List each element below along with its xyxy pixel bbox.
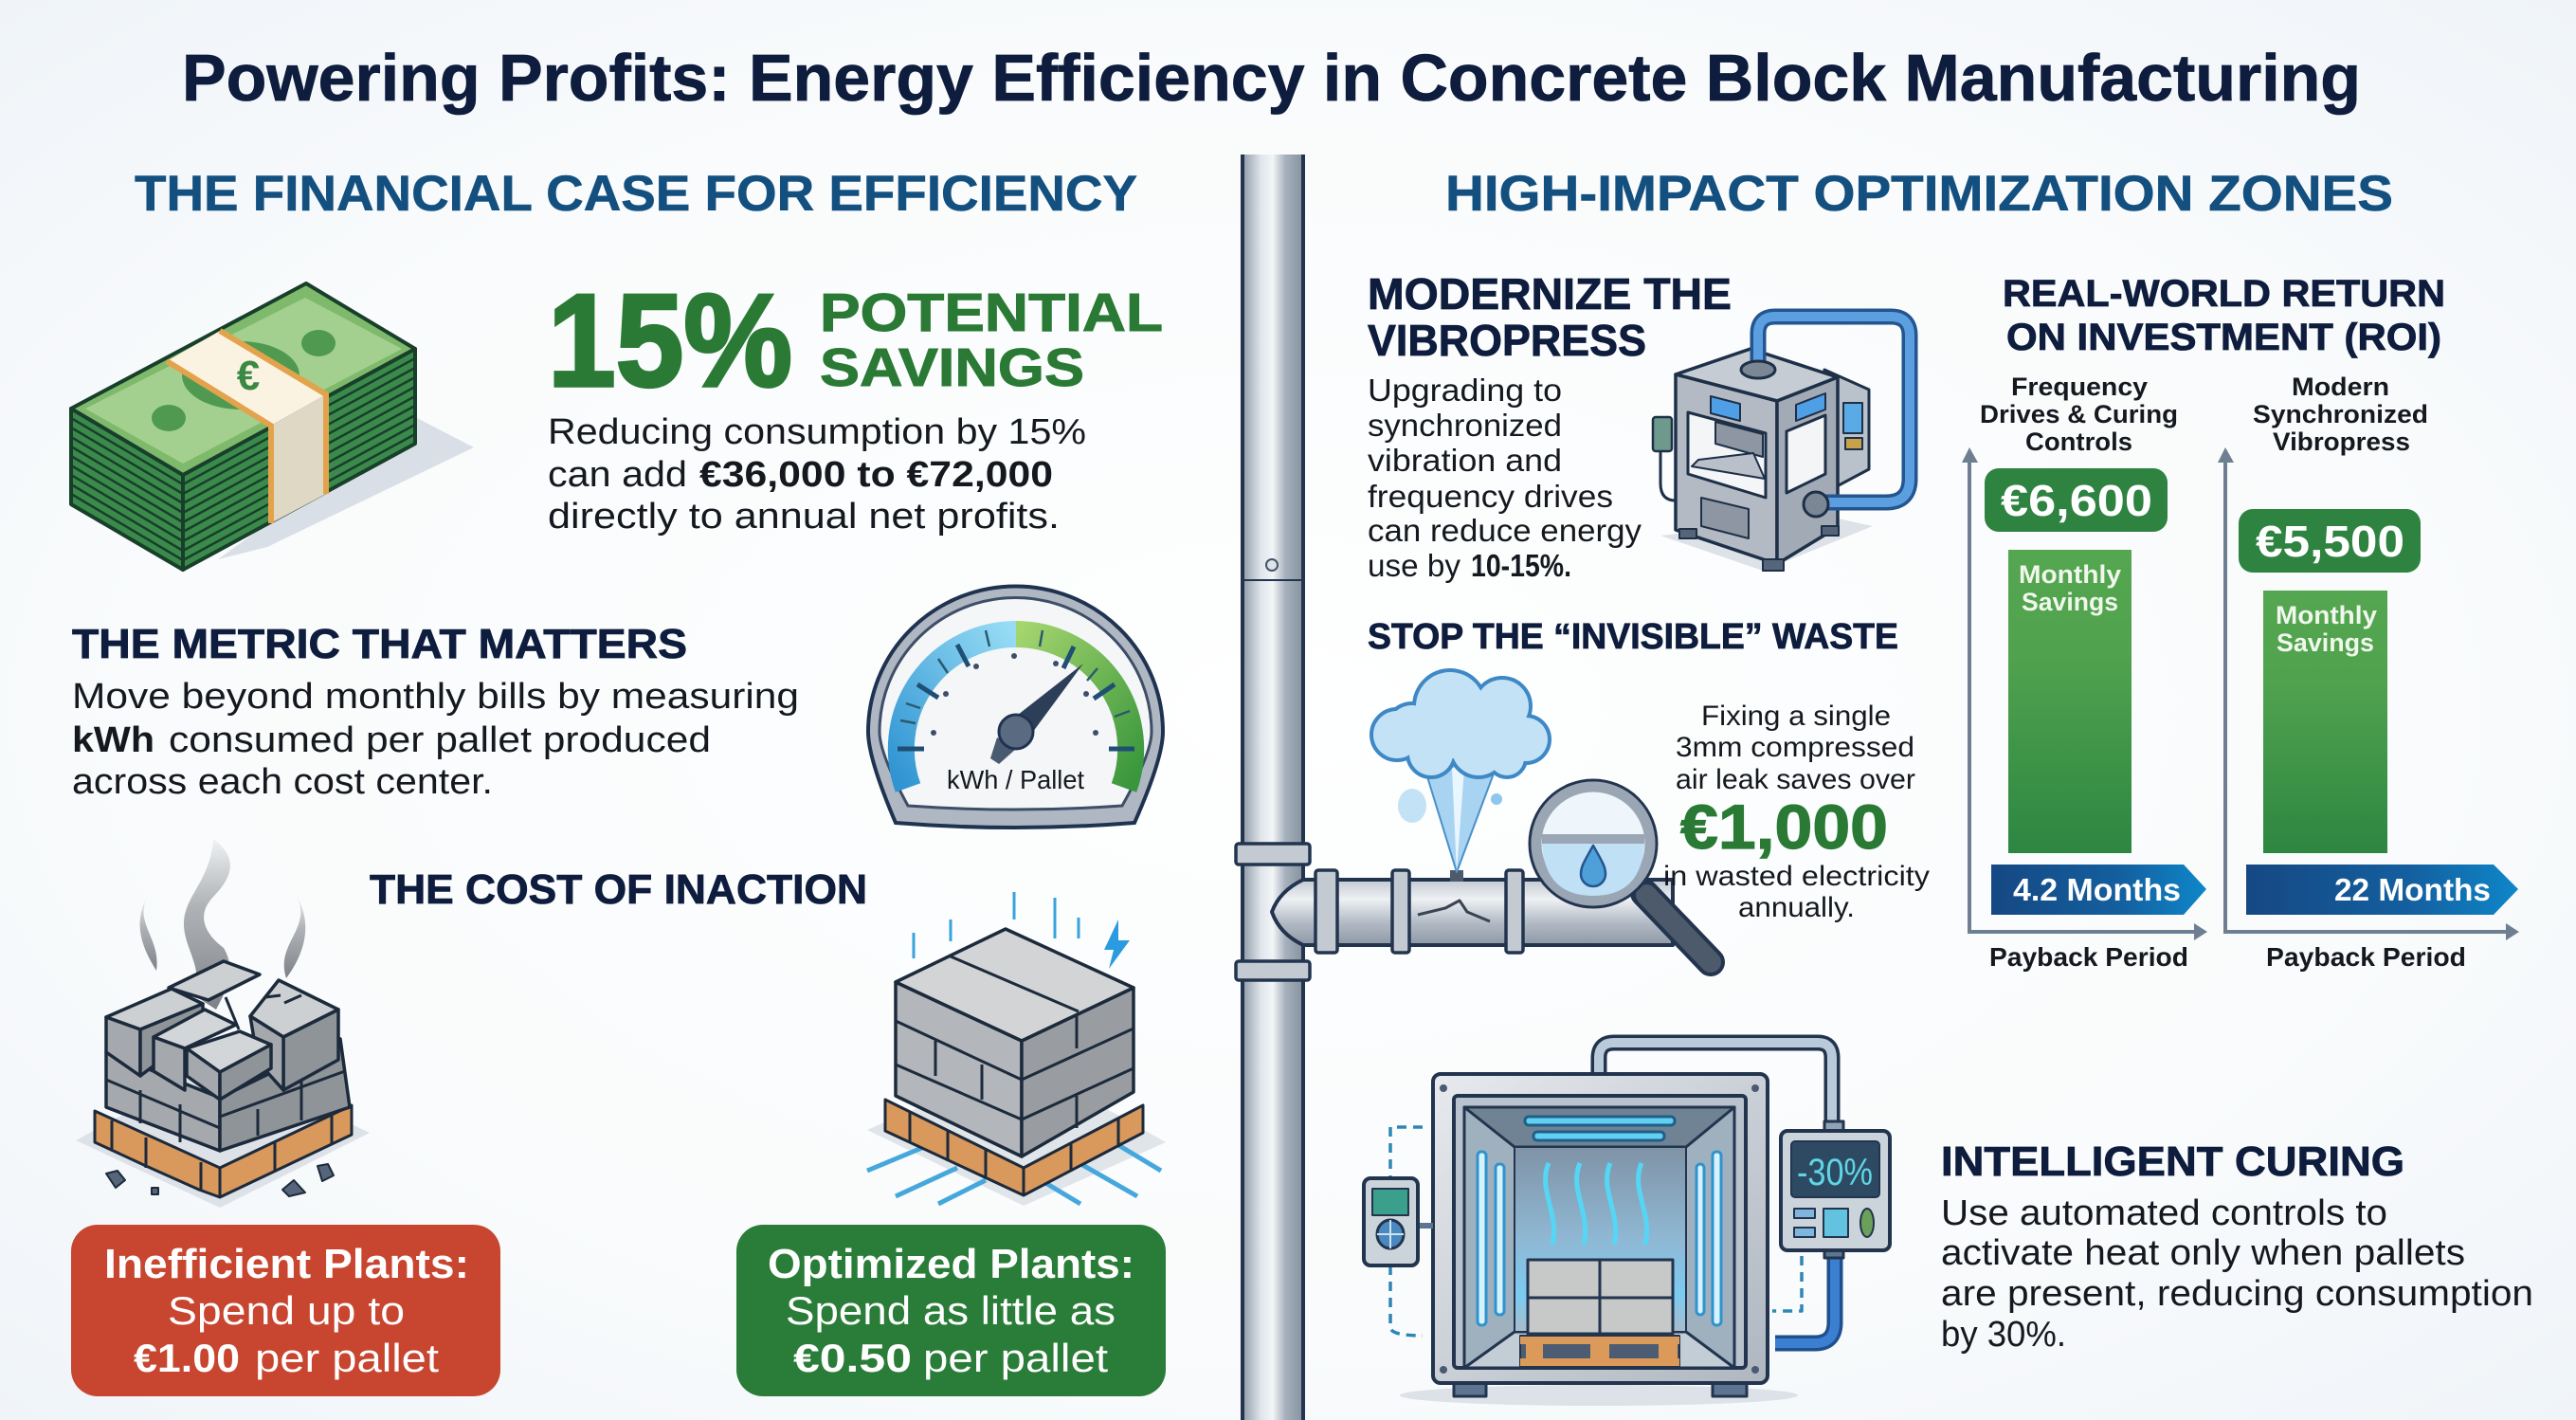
bar: monthly savings [2008, 550, 2132, 853]
icon: stack of euro banknotes [71, 283, 474, 570]
callout: optimized plants: Optimized Plants: [768, 1241, 1134, 1287]
value: 6600: €6,600 [2001, 476, 2152, 525]
chart: frequency drives and curing controls ROI: Payback Period [1989, 942, 2188, 972]
bar: monthly savings [2263, 591, 2387, 853]
bar: monthly savings: Monthly [2276, 601, 2377, 629]
control panel: sensor [1364, 1178, 1433, 1265]
text: vibropress description: vibration and [1368, 443, 1562, 478]
text: curing description: activate heat only when pallets [1941, 1233, 2465, 1273]
heading: real-world ROI: ON INVESTMENT (ROI) [2006, 317, 2441, 358]
chart label [1980, 373, 2178, 456]
stat: 15% potential savings: POTENTIAL [820, 282, 1163, 343]
divider: vertical pipe [1236, 155, 1310, 1420]
icon: intact blocks on pallet [867, 892, 1166, 1206]
arrow: payback 22 months [2246, 865, 2518, 915]
chart label: Drives & Curing [1980, 400, 2178, 428]
text: curing description: by 30%. [1941, 1315, 2066, 1355]
bar: monthly savings: Savings [2277, 628, 2374, 657]
value: 5500: €5,500 [2256, 517, 2404, 566]
icon: vibropress machine [1653, 317, 1910, 571]
chart label: Synchronized [2253, 400, 2428, 428]
chart: modern synchronized vibropress ROI: Payback Period [2266, 942, 2466, 972]
text: savings description: can add [548, 455, 687, 495]
text: metric description: consumed per pallet produced [169, 720, 711, 760]
heading: optimization zones: HIGH-IMPACT OPTIMIZATION ZONES [1445, 166, 2393, 222]
text: savings description: Reducing consumption by 15% [548, 412, 1086, 452]
chart label: Vibropress [2273, 428, 2410, 456]
value: 6600 [1985, 468, 2168, 532]
heading: financial case: THE FINANCIAL CASE FOR EFFICIENCY [135, 166, 1137, 222]
text: air leak savings: annually. [1738, 892, 1855, 923]
heading: modernize the vibropress: MODERNIZE THE [1368, 269, 1732, 319]
text: air leak savings: in wasted electricity [1663, 861, 1930, 892]
callout: optimized plants: Spend as little as [786, 1288, 1116, 1333]
icon: smart curing chamber [1364, 1043, 1890, 1406]
chart label: Frequency [2011, 373, 2148, 401]
icon: stack of euro banknotes: € [237, 353, 260, 399]
text: metric description: across each cost center. [72, 762, 493, 802]
text: metric description [72, 677, 799, 802]
callout: optimized plants: €0.50 [793, 1336, 912, 1380]
callout: inefficient plants: per pallet [255, 1336, 439, 1380]
stat: 15% potential savings: SAVINGS [820, 337, 1084, 398]
value: 5500 [2239, 509, 2421, 573]
heading: stop the invisible waste: STOP THE “INVISIBLE” WASTE [1368, 617, 1898, 657]
text: vibropress description: can reduce energy [1368, 513, 1642, 548]
stat: 15% potential savings [548, 267, 1163, 414]
icon: leaking pipe with magnifier [1272, 670, 1711, 962]
text: savings description: €36,000 to €72,000 [699, 455, 1053, 495]
callout: inefficient plants: €1.00 [134, 1336, 240, 1380]
chart label: Controls [2025, 428, 2132, 456]
text: air leak savings [1663, 701, 1930, 923]
text: air leak savings: air leak saves over [1676, 764, 1915, 795]
heading: real-world ROI: REAL-WORLD RETURN [2003, 273, 2445, 315]
text: curing description: Use automated controls to [1941, 1193, 2387, 1233]
text: air leak savings: €1,000 [1680, 792, 1888, 862]
bar: monthly savings: Savings [2022, 588, 2118, 616]
text: metric description: kWh [72, 720, 154, 760]
text: air leak savings: 3mm compressed [1676, 732, 1914, 763]
chart: modern synchronized vibropress ROI [2218, 373, 2519, 972]
callout: inefficient plants [71, 1225, 500, 1396]
callout: inefficient plants: Spend up to [168, 1288, 405, 1333]
heading: intelligent curing: INTELLIGENT CURING [1941, 1138, 2404, 1185]
text: vibropress description: 10-15%. [1471, 548, 1571, 583]
text: curing description [1941, 1193, 2533, 1355]
control panel: -30% display [1781, 1121, 1890, 1258]
icon: kWh per pallet gauge: kWh / Pallet [947, 765, 1084, 794]
icon: cracked blocks on pallet with smoke [76, 839, 370, 1208]
text: savings description: directly to annual net profits. [548, 497, 1060, 537]
text: curing description: are present, reducing consumption [1941, 1274, 2533, 1314]
text: metric description: Move beyond monthly bills by measuring [72, 677, 799, 717]
chart label [2253, 373, 2428, 456]
heading: the metric that matters: THE METRIC THAT MATTERS [72, 621, 687, 667]
arrow: payback 4.2 months: 4.2 Months [2013, 872, 2181, 907]
callout: optimized plants [736, 1225, 1166, 1396]
icon: kWh per pallet gauge [868, 587, 1163, 828]
callout: optimized plants: per pallet [923, 1336, 1108, 1380]
arrow: payback 22 months: 22 Months [2334, 872, 2491, 907]
text: vibropress description: synchronized [1368, 408, 1562, 443]
text: vibropress description [1368, 373, 1642, 583]
chart: frequency drives and curing controls ROI [1962, 373, 2207, 972]
text: vibropress description: use by [1368, 548, 1460, 583]
title: Powering Profits: Energy Efficiency in Concrete Block Manufacturing [182, 41, 2361, 115]
text: vibropress description: Upgrading to [1368, 373, 1562, 408]
heading: real-world ROI [2003, 273, 2445, 358]
control panel: -30% display: -30% [1797, 1152, 1873, 1193]
text: savings description [548, 412, 1086, 537]
stat: 15% potential savings: 15% [548, 267, 792, 414]
heading: modernize the vibropress [1368, 269, 1732, 365]
chart label: Modern [2292, 373, 2389, 401]
heading: modernize the vibropress: VIBROPRESS [1368, 316, 1646, 365]
heading: the cost of inaction: THE COST OF INACTION [370, 866, 867, 913]
arrow: payback 4.2 months [1991, 865, 2206, 915]
callout: inefficient plants: Inefficient Plants: [104, 1241, 469, 1287]
text: air leak savings: Fixing a single [1701, 701, 1891, 732]
text: vibropress description: frequency drives [1368, 479, 1613, 514]
bar: monthly savings: Monthly [2019, 560, 2121, 589]
